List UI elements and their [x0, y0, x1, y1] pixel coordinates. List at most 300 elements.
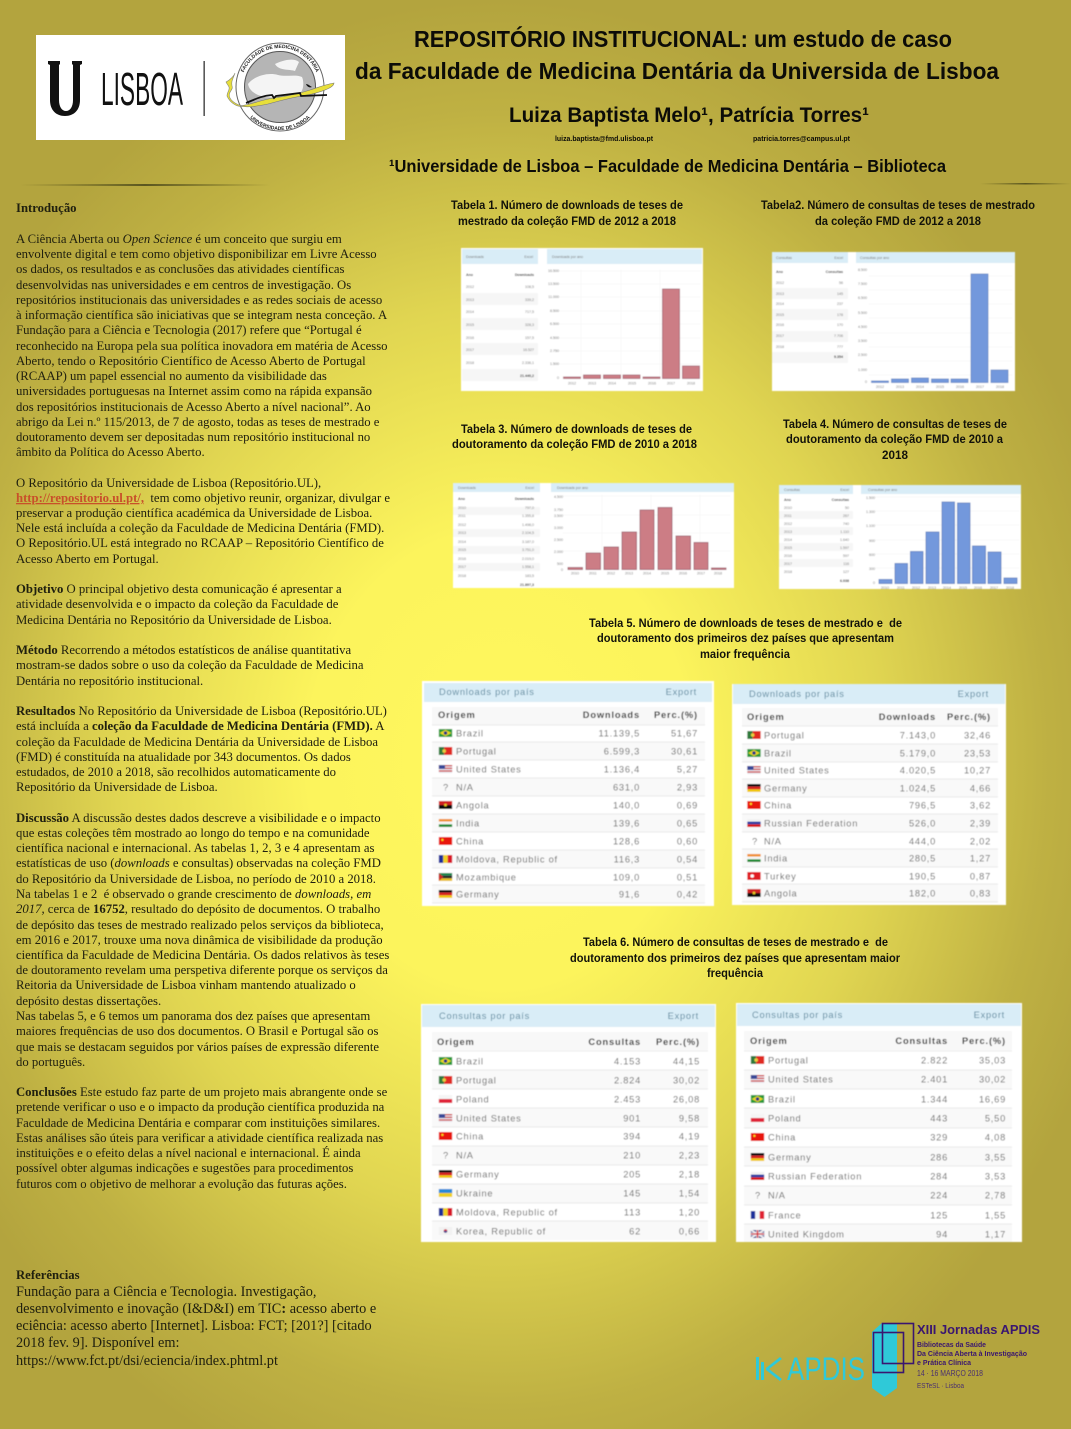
- section: Introdução: doutoramento devem ser depositadas num repositório institucional no: [16, 430, 370, 444]
- table: Downloads por país, right: Perc.(%): [947, 712, 991, 722]
- table: Downloads por país, right: Turkey: [764, 872, 797, 882]
- section: Resultados: Resultados No Repositório da Universidade de Lisboa (Repositório.UL): [16, 704, 387, 718]
- table: Downloads por país, left: 0,54: [677, 854, 698, 864]
- chart panel: Tabela 1 downloads by year: 4.500: [550, 336, 559, 340]
- table: Consultas por país, right: 16,69: [979, 1094, 1006, 1104]
- chart panel: Tabela 2 consultations by year: 2016: [776, 323, 784, 327]
- section: Discussão: Nas tabelas 5, e 6 temos um panorama dos dez países que apresentam: [16, 1009, 370, 1023]
- chart panel: Tabela 4 consultations by year: 2014: [784, 538, 792, 542]
- chart panel: Tabela 3 downloads by year: 2013: [625, 572, 633, 576]
- table: Downloads por país, right: 4,66: [970, 784, 991, 794]
- chart panel: Tabela 4 consultations by year: Consultas por ano: [868, 488, 897, 492]
- table: Consultas por país, left: 2,18: [679, 1170, 700, 1180]
- table: Downloads por país, right: [732, 684, 1006, 905]
- table: Consultas por país, right: Export: [974, 1010, 1005, 1020]
- table: Consultas por país, right: 1.344: [921, 1094, 948, 1104]
- table: Consultas por país, right: N/A: [768, 1190, 786, 1200]
- caption: Tabela 6: Tabela 6. Número de consultas de teses de mestrado e de: [583, 937, 888, 949]
- section: Referências: https://www.fct.pt/dsi/eciencia/index.phtml.pt: [16, 1353, 278, 1369]
- table: Consultas por país, right: France: [768, 1210, 801, 1220]
- table: Consultas por país, left: United States: [456, 1114, 522, 1124]
- table: Consultas por país, left: Consultas por país: [439, 1011, 530, 1021]
- chart panel: Tabela 1 downloads by year: 339,2: [525, 298, 534, 302]
- caption: Tabela 6: frequência: [707, 968, 764, 980]
- table: Consultas por país, left: 1,54: [679, 1188, 700, 1198]
- caption: Tabela 4: 2018: [882, 450, 909, 462]
- table: Downloads por país, right: 23,53: [964, 748, 991, 758]
- section: Objetivo: Medicina Dentária no Repositório da Universidade de Lisboa.: [16, 613, 332, 627]
- chart panel: Tabela 3 downloads by year: 2013: [458, 531, 466, 535]
- chart panel: Tabela 2 consultations by year: [772, 252, 1015, 391]
- chart panel: Tabela 3 downloads by year: 797,0: [525, 506, 534, 510]
- caption: Tabela 3: doutoramento da coleção FMD de 2010 a 2018: [452, 439, 698, 451]
- table: Downloads por país, right: 444,0: [909, 836, 936, 846]
- chart panel: Tabela 2 consultations by year: 0: [865, 380, 867, 384]
- table: Downloads por país, left: Germany: [456, 890, 499, 900]
- table: Consultas por país, right: Consultas por país: [752, 1010, 843, 1020]
- chart panel: Tabela 4 consultations by year: 2014: [943, 586, 951, 590]
- section: Conclusões: pretende verificar o uso e o impacto da produção científica produzida na: [16, 1100, 385, 1114]
- table: Consultas por país, left: 113: [624, 1208, 641, 1218]
- table: Consultas por país, left: 0,66: [679, 1226, 700, 1236]
- table: Consultas por país, right: 3,55: [985, 1152, 1006, 1162]
- chart panel: Tabela 4 consultations by year: Excel: [840, 488, 849, 492]
- chart panel: Tabela 2 consultations by year: 170: [837, 323, 843, 327]
- chart panel: Tabela 4 consultations by year: 2017: [784, 562, 792, 566]
- table: Downloads por país, left: Export: [666, 687, 697, 697]
- chart panel: Tabela 3 downloads by year: 2014: [458, 540, 466, 544]
- chart panel: Tabela 1 downloads by year: Downloads: [515, 273, 534, 277]
- chart panel: Tabela 2 consultations by year: 2012: [876, 385, 884, 389]
- chart panel: Tabela 3 downloads by year: 2015: [458, 548, 466, 552]
- section: Discussão: estatísticas de uso (downloads e consultas) observadas na coleção FMD: [16, 856, 381, 870]
- table: Consultas por país, left: Perc.(%): [656, 1037, 700, 1047]
- chart panel: Tabela 3 downloads by year: 2.104,5: [522, 531, 534, 535]
- chart panel: Tabela 4 consultations by year: 2012: [784, 522, 792, 526]
- table: Downloads por país, left: Origem: [438, 710, 476, 720]
- chart panel: Tabela 3 downloads by year: 2014: [643, 572, 651, 576]
- table: Downloads por país, right: 190,5: [909, 872, 936, 882]
- chart panel: Tabela 3 downloads by year: 2.000: [554, 550, 563, 554]
- bars: consultations by year: [879, 502, 1017, 584]
- section: Conclusões: futuros com o objetivo de melhorar a evolução das futuras ações.: [16, 1177, 347, 1191]
- chart panel: Tabela 3 downloads by year: 1.355,8: [522, 514, 534, 518]
- chart panel: Tabela 1 downloads by year: 2012: [568, 382, 576, 386]
- table: Downloads por país, left: 116,3: [614, 854, 640, 864]
- chart panel: Tabela 2 consultations by year: Excel: [834, 256, 843, 260]
- event details: ESTeSL · Lisboa: [917, 1383, 964, 1390]
- chart panel: Tabela 2 consultations by year: 178: [837, 313, 843, 317]
- section: Introdução: reconhecido na Europa pela sua política inovadora em matéria de Acesso: [16, 339, 388, 353]
- chart panel: Tabela 1 downloads by year: 2014: [608, 382, 616, 386]
- bars: downloads by year: [568, 508, 726, 570]
- chart panel: Tabela 3 downloads by year: 1.498,0: [522, 523, 534, 527]
- table: Downloads por país, right: Angola: [764, 888, 798, 898]
- section: Método: Método Recorrendo a métodos estatísticos de análise quantitativa: [16, 643, 352, 657]
- table: Downloads por país, left: United States: [456, 764, 522, 774]
- chart panel: Tabela 2 consultations by year: 2014: [916, 385, 924, 389]
- chart panel: Tabela 3 downloads by year: 2012: [458, 523, 466, 527]
- table: Downloads por país, left: 30,61: [671, 746, 698, 756]
- section: Introdução: âmbito da Política do Acesso Aberto.: [16, 445, 205, 459]
- section: Repositório.UL: Acesso Aberto em Portugal.: [16, 552, 159, 566]
- section: Discussão: Discussão A discussão destes dados descreve a visibilidade e o impacto: [16, 811, 381, 825]
- icon: bookmark and squares: [872, 1323, 914, 1397]
- chart panel: Tabela 4 consultations by year: 2013: [784, 530, 792, 534]
- icon: APDIS mark: [756, 1357, 782, 1381]
- table: Consultas por país, right: Portugal: [768, 1056, 809, 1066]
- section: Referências: desenvolvimento e inovação (I&D&I) em TIC: acesso aberto e: [16, 1301, 376, 1317]
- chart panel: Tabela 1 downloads by year: 11.000: [548, 295, 559, 299]
- table: Consultas por país, right: Germany: [768, 1152, 811, 1162]
- chart panel: Tabela 2 consultations by year: 2015: [776, 313, 784, 317]
- table: Downloads por país, right: 182,0: [909, 888, 936, 898]
- caption: Tabela 1: mestrado da coleção FMD de 2012 a 2018: [458, 216, 677, 228]
- table: Consultas por país, left: 394: [623, 1132, 641, 1142]
- section: Referências: [16, 1268, 376, 1369]
- table: Consultas por país, left: 26,08: [673, 1094, 700, 1104]
- table: Downloads por país, left: 139,6: [613, 818, 640, 828]
- title: REPOSITÓRIO INSTITUCIONAL: um estudo de caso: [414, 25, 952, 52]
- section: Discussão: do português.: [16, 1055, 85, 1069]
- chart panel: Tabela 1 downloads by year: 2.336,1: [522, 361, 534, 365]
- section: Objetivo: atividade desenvolvida e o impacto da coleção da Faculdade de: [16, 597, 339, 611]
- table: Consultas por país, right: 329: [930, 1132, 948, 1142]
- table: Downloads por país, right: 0,87: [970, 872, 991, 882]
- section: Discussão: Reitoria da Universidade de Lisboa vinham mantendo atualizado o: [16, 978, 356, 992]
- section: Discussão: de depósito das teses de mestrado realizado pelos serviços da biblioteca,: [16, 918, 384, 932]
- table: Downloads por país, left: ?: [443, 782, 449, 792]
- table: Consultas por país, left: Portugal: [456, 1076, 497, 1086]
- table: Consultas por país, right: 3,53: [985, 1172, 1006, 1182]
- section: Método: mostram-se dados sobre o uso da coleção da Faculdade de Medicina: [16, 658, 364, 672]
- section: Conclusões: Estas análises são úteis para verificar a atividade científica realizada nas: [16, 1131, 383, 1145]
- table: Consultas por país, left: N/A: [456, 1150, 474, 1160]
- chart panel: Tabela 1 downloads by year: 2016: [648, 382, 656, 386]
- chart panel: Tabela 4 consultations by year: 2011: [784, 514, 792, 518]
- table: Downloads por país, left: 1.136,4: [604, 764, 640, 774]
- table: Consultas por país, right: Perc.(%): [962, 1036, 1006, 1046]
- table: Consultas por país, left: 62: [629, 1226, 641, 1236]
- chart panel: Tabela 3 downloads by year: 2017: [458, 565, 466, 569]
- section: Introdução: Aberto, tendo o Repositório Científico de Acesso Aberto de Portugal: [16, 354, 366, 368]
- chart panel: Tabela 3 downloads by year: 3.500: [554, 514, 563, 518]
- section: Objetivo: Objetivo O principal objetivo desta comunicação é apresentar a: [16, 582, 342, 596]
- table: Consultas por país, left: 1,20: [679, 1208, 700, 1218]
- caption: Tabela 2: [761, 200, 1035, 228]
- event details: Bibliotecas da Saúde: [917, 1340, 986, 1349]
- event details: [917, 1322, 1040, 1390]
- section: Introdução: universidades portuguesas na Internet assim como na rápida expansão: [16, 384, 372, 398]
- section: Discussão: maiores frequências de uso dos documentos. O Brasil e Portugal são os: [16, 1024, 378, 1038]
- table: Downloads por país, left: 6.599,3: [604, 746, 640, 756]
- chart panel: Tabela 1 downloads by year: 108,5: [525, 285, 534, 289]
- section: Discussão: depósito destas dissertações.: [16, 994, 161, 1008]
- chart panel: Tabela 4 consultations by year: 1.100: [866, 524, 875, 528]
- section: Discussão: científica nacional e internacional. As tabelas 1, 2, 3 e 4 apresentam as: [16, 841, 375, 855]
- chart panel: Tabela 4 consultations by year: [779, 485, 1021, 590]
- chart panel: Tabela 1 downloads by year: 157,5: [525, 336, 534, 340]
- caption: Tabela 2: da coleção FMD de 2012 a 2018: [815, 216, 982, 228]
- chart panel: Tabela 3 downloads by year: 2017: [697, 572, 705, 576]
- section: Repositório.UL: O Repositório da Universidade de Lisboa (Repositório.UL),: [16, 476, 321, 490]
- table: Downloads por país, right: Germany: [764, 784, 807, 794]
- table: Consultas por país, left: [421, 1004, 716, 1242]
- chart panel: Tabela 2 consultations by year: 145: [837, 292, 843, 296]
- section: Discussão: em 2016 e 2017, trouxe uma nova dinâmica de visibilidade da produção: [16, 933, 383, 947]
- table: Downloads por país, right: N/A: [764, 836, 782, 846]
- chart panel: Tabela 3 downloads by year: Ano: [458, 497, 466, 501]
- logo panel: Universidade de Lisboa and Faculdade de Medicina Dentária: LISBOA: [101, 63, 183, 115]
- chart panel: Tabela 3 downloads by year: 3.187,0: [522, 540, 534, 544]
- section: Introdução: os dados, os resultados e as conclusões das atividades científicas: [16, 262, 345, 276]
- chart panel: Tabela 4 consultations by year: 600: [869, 553, 875, 557]
- section: Referências: eciência: acesso aberto [Internet]. Lisboa: FCT; [201?] [citado: [16, 1318, 372, 1334]
- section: Discussão: de doutoramento revelam uma perspetiva diferente porque os serviços da: [16, 963, 388, 977]
- table: Downloads por país, left: 0,51: [677, 872, 698, 882]
- chart panel: Tabela 3 downloads by year: Excel: [525, 486, 534, 490]
- emblem: Faculdade de Medicina Dentária: UNIVERSIDADE DE LISBOA: [250, 115, 310, 130]
- chart panel: Tabela 3 downloads by year: 2015: [661, 572, 669, 576]
- chart panel: Tabela 4 consultations by year: 2011: [897, 586, 905, 590]
- table: Consultas por país, left: 30,02: [673, 1076, 700, 1086]
- chart panel: Tabela 4 consultations by year: 300: [869, 567, 875, 571]
- table: Downloads por país, left: Moldova, Republic of: [456, 854, 558, 864]
- chart panel: Tabela 1 downloads by year: 2013: [466, 298, 474, 302]
- section: Introdução: repositórios institucionais das universidades e as redes sociais de acesso: [16, 293, 382, 307]
- table: Downloads por país, right: 280,5: [909, 854, 936, 864]
- chart panel: Tabela 3 downloads by year: Downloads por ano: [557, 486, 588, 490]
- authors: Luiza Baptista Melo¹, Patrícia Torres¹: [509, 104, 869, 127]
- chart panel: Tabela 2 consultations by year: 8.500: [858, 268, 867, 272]
- chart panel: Tabela 4 consultations by year: 900: [869, 539, 875, 543]
- section: Resultados: [16, 704, 387, 794]
- table: Consultas por país, left: 4,19: [679, 1132, 700, 1142]
- chart panel: Tabela 4 consultations by year: Consultas: [784, 488, 800, 492]
- chart panel: Tabela 1 downloads by year: 16.500: [548, 269, 559, 273]
- section: Conclusões: possível obter algumas indicações e sugestões para procedimentos: [16, 1161, 353, 1175]
- chart panel: Tabela 2 consultations by year: 2014: [776, 302, 784, 306]
- chart panel: Tabela 4 consultations by year: 1.110: [840, 530, 849, 534]
- chart panel: Tabela 3 downloads by year: 2.500: [554, 538, 563, 542]
- table: Downloads por país, right: Russian Federation: [764, 818, 858, 828]
- table: Downloads por país, right: 2,39: [970, 818, 991, 828]
- table: Consultas por país, right: 35,03: [979, 1056, 1006, 1066]
- bars: downloads by year: [564, 289, 700, 378]
- section: Repositório.UL: O Repositório.UL está integrado no RCAAP – Repositório Científico de: [16, 536, 384, 550]
- chart panel: Tabela 1 downloads by year: 2014: [466, 310, 474, 314]
- table: Downloads por país, left: 0,42: [677, 890, 698, 900]
- table: Downloads por país, left: N/A: [456, 782, 474, 792]
- table: Downloads por país, right: Export: [958, 689, 989, 699]
- chart panel: Tabela 3 downloads by year: 2012: [607, 572, 615, 576]
- section: Discussão: Na tabelas 1 e 2 é observado o grande crescimento de downloads, em: [16, 887, 371, 901]
- chart panel: Tabela 4 consultations by year: 267: [843, 514, 849, 518]
- table: Downloads por país, right: Portugal: [764, 730, 805, 740]
- table: Consultas por país, right: Origem: [750, 1036, 788, 1046]
- table: Consultas por país, right: 286: [930, 1152, 948, 1162]
- chart panel: Tabela 4 consultations by year: 50: [845, 506, 849, 510]
- caption: Tabela 5: maior frequência: [700, 649, 791, 661]
- chart panel: Tabela 1 downloads by year: Downloads por ano: [552, 255, 583, 259]
- caption: Tabela 4: doutoramento da coleção FMD de 2010 a: [786, 434, 1004, 446]
- section: Repositório.UL: preservar a produção científica académica da Universidade de Lisboa.: [16, 506, 372, 520]
- chart panel: Tabela 3 downloads by year: 21.897,3: [520, 583, 534, 587]
- chart panel: Tabela 1 downloads by year: 2013: [588, 382, 596, 386]
- table: Consultas por país, right: Poland: [768, 1114, 801, 1124]
- table: Downloads por país, left: Angola: [456, 800, 490, 810]
- table: Consultas por país, right: 94: [936, 1230, 948, 1240]
- table: Downloads por país, left: Downloads por país: [439, 687, 535, 697]
- chart panel: Tabela 1 downloads by year: 2017: [667, 382, 675, 386]
- chart panel: Tabela 4 consultations by year: 2015: [784, 546, 792, 550]
- chart panel: Tabela 2 consultations by year: 2013: [776, 292, 784, 296]
- chart panel: Tabela 2 consultations by year: 7.500: [858, 282, 867, 286]
- table: Downloads por país, left: 631,0: [613, 782, 640, 792]
- chart panel: Tabela 2 consultations by year: 1.000: [858, 368, 867, 372]
- table: Downloads por país, right: 32,46: [964, 730, 991, 740]
- section: Resultados: está incluída a coleção da Faculdade de Medicina Dentária (FMD). A: [16, 719, 385, 733]
- table: Consultas por país, left: 9,58: [679, 1114, 700, 1124]
- chart panel: Tabela 3 downloads by year: 2016: [458, 557, 466, 561]
- APDIS wordmark: APDIS: [787, 1351, 865, 1387]
- section: Discussão: que mais se destacam seguidos por vários países de expressão diferente: [16, 1040, 379, 1054]
- section: Referências: Fundação para a Ciência e Tecnologia. Investigação,: [16, 1284, 316, 1300]
- section: Método: Dentária no repositório institucional.: [16, 674, 203, 688]
- table: Downloads por país, right: 4.020,5: [900, 766, 936, 776]
- table: Consultas por país, right: United States: [768, 1074, 834, 1084]
- table: Downloads por país, right: Downloads: [879, 712, 936, 722]
- table: Downloads por país, right: Downloads por país: [749, 689, 845, 699]
- section: Introdução: desenvolvidas nas universidades e em centros de investigação. Os: [16, 278, 351, 292]
- chart panel: Tabela 3 downloads by year: 2018: [714, 572, 722, 576]
- table: Consultas por país, left: 2,23: [679, 1150, 700, 1160]
- section: Introdução: (RCAAP) um papel essencial no aumento da visibilidade das: [16, 369, 327, 383]
- chart panel: Tabela 1 downloads by year: 2015: [628, 382, 636, 386]
- section: Resultados: (FMD) é constituída na atualidade por 343 documentos. Os dados: [16, 750, 351, 764]
- table: Downloads por país, right: United States: [764, 766, 830, 776]
- chart panel: Tabela 4 consultations by year: Consultas: [832, 498, 849, 502]
- chart panel: Tabela 4 consultations by year: 740: [843, 522, 849, 526]
- table: Downloads por país, right: 3,62: [970, 800, 991, 810]
- table: Downloads por país, left: 51,67: [671, 728, 698, 738]
- chart panel: Tabela 4 consultations by year: 2016: [784, 554, 792, 558]
- event details: XIII Jornadas APDIS: [917, 1322, 1040, 1337]
- chart panel: Tabela 4 consultations by year: 2013: [928, 586, 936, 590]
- chart panel: Tabela 3 downloads by year: 4.500: [554, 495, 563, 499]
- chart panel: Tabela 4 consultations by year: 1.640: [840, 538, 849, 542]
- table: Downloads por país, left: Portugal: [456, 746, 497, 756]
- chart panel: Tabela 2 consultations by year: 3.500: [858, 339, 867, 343]
- table: Downloads por país, left: China: [456, 836, 484, 846]
- chart panel: Tabela 1 downloads by year: 2018: [466, 361, 474, 365]
- table: Consultas por país, right: 224: [930, 1190, 948, 1200]
- chart panel: Tabela 4 consultations by year: 2010: [784, 506, 792, 510]
- table: Consultas por país, left: Origem: [437, 1037, 475, 1047]
- table: Consultas por país, left: Export: [668, 1011, 699, 1021]
- section: Repositório.UL: http://repositorio.ul.pt/, tem como objetivo reunir, organizar, divulgar e: [16, 491, 390, 505]
- chart panel: Tabela 2 consultations by year: Consultas: [826, 270, 843, 274]
- chart panel: Tabela 1 downloads by year: Downloads: [466, 255, 484, 259]
- chart panel: Tabela 2 consultations by year: 2017: [976, 385, 984, 389]
- chart panel: Tabela 3 downloads by year: [453, 483, 734, 588]
- table: Consultas por país, left: 205: [623, 1170, 641, 1180]
- table: Downloads por país, right: China: [764, 800, 792, 810]
- chart panel: Tabela 3 downloads by year: 500: [557, 562, 563, 566]
- chart panel: Tabela 1 downloads by year: [461, 248, 703, 391]
- chart panel: Tabela 2 consultations by year: 2016: [956, 385, 964, 389]
- chart panel: Tabela 1 downloads by year: 1.500: [550, 362, 559, 366]
- table: Consultas por país, right: 443: [930, 1114, 948, 1124]
- table: Consultas por país, left: Poland: [456, 1094, 489, 1104]
- table: Consultas por país, left: 901: [623, 1114, 641, 1124]
- chart panel: Tabela 3 downloads by year: 3.000: [554, 526, 563, 530]
- table: Consultas por país, left: 2.824: [614, 1076, 641, 1086]
- section: Discussão: que estas coleções têm mostrado ao longo do tempo e na comunidade: [16, 826, 370, 840]
- bars: consultations by year: [872, 274, 1008, 382]
- chart panel: Tabela 4 consultations by year: 1.597: [840, 546, 849, 550]
- section: Repositório.UL: Nele está incluída a coleção da Faculdade de Medicina Dentária (FMD).: [16, 521, 384, 535]
- section: Objetivo: [16, 582, 342, 627]
- chart panel: Tabela 1 downloads by year: 717,5: [525, 310, 534, 314]
- chart panel: Tabela 2 consultations by year: 6.500: [858, 296, 867, 300]
- caption: Tabela 4: Tabela 4. Número de consultas de teses de: [783, 419, 1007, 431]
- caption: Tabela 6: [570, 937, 901, 980]
- table: Consultas por país, right: 1,17: [985, 1230, 1006, 1240]
- chart panel: Tabela 2 consultations by year: 237: [837, 302, 843, 306]
- table: Downloads por país, left: 128,6: [613, 836, 640, 846]
- section: Discussão: 2017, cerca de 16752, resultado do depósito de documentos. O trabalho: [16, 902, 380, 916]
- table: Downloads por país, left: 109,0: [613, 872, 640, 882]
- chart panel: Tabela 3 downloads by year: 3.751,0: [522, 548, 534, 552]
- table: Consultas por país, right: 30,02: [979, 1074, 1006, 1084]
- chart panel: Tabela 1 downloads by year: Excel: [524, 255, 533, 259]
- table: Consultas por país, left: Consultas: [588, 1037, 641, 1047]
- chart panel: Tabela 4 consultations by year: 2018: [1006, 586, 1014, 590]
- chart panel: Tabela 3 downloads by year: 2011: [458, 514, 466, 518]
- section: Repositório.UL: [16, 476, 390, 566]
- chart panel: Tabela 2 consultations by year: 7.706: [834, 334, 843, 338]
- chart panel: Tabela 4 consultations by year: 127: [843, 570, 849, 574]
- table: Downloads por país, left: 2,93: [677, 782, 698, 792]
- table: Consultas por país, left: 4.153: [614, 1056, 641, 1066]
- section: Conclusões: [16, 1085, 388, 1191]
- chart panel: Tabela 2 consultations by year: 56: [839, 281, 843, 285]
- caption: Tabela 2: Tabela2. Número de consultas de teses de mestrado: [761, 200, 1035, 212]
- chart panel: Tabela 2 consultations by year: 2.500: [858, 353, 867, 357]
- table: Downloads por país, left: 0,60: [677, 836, 698, 846]
- caption: Tabela 1: Tabela 1. Número de downloads de teses de: [451, 200, 683, 212]
- chart panel: Tabela 4 consultations by year: 2016: [974, 586, 982, 590]
- chart panel: Tabela 4 consultations by year: 1.500: [866, 496, 875, 500]
- table: Consultas por país, right: 2,78: [985, 1190, 1006, 1200]
- chart panel: Tabela 2 consultations by year: 2017: [776, 334, 784, 338]
- table: Downloads por país, right: 10,27: [964, 766, 991, 776]
- caption: Tabela 3: Tabela 3. Número de downloads de teses de: [461, 424, 692, 436]
- event details: e Prática Clínica: [917, 1358, 972, 1367]
- table: Downloads por país, right: 796,5: [909, 800, 936, 810]
- section: Introdução: à informação científica são iniciativas que se integram nesta conceção. A: [16, 308, 388, 322]
- table: Downloads por país, left: Downloads: [583, 710, 640, 720]
- section: Método: [16, 643, 364, 688]
- chart panel: Tabela 2 consultations by year: Ano: [776, 270, 784, 274]
- chart panel: Tabela 1 downloads by year: 21.440,2: [520, 374, 534, 378]
- section: Discussão: científica da Faculdade de Medicina Dentária. Os dados relativos às teses: [16, 948, 389, 962]
- chart panel: Tabela 1 downloads by year: 2.750: [550, 349, 559, 353]
- table: Consultas por país, left: 44,15: [673, 1056, 700, 1066]
- author emails: luiza.baptista@fmd.ulisboa.pt: [555, 136, 654, 143]
- chart panel: Tabela 3 downloads by year: 2018: [458, 574, 466, 578]
